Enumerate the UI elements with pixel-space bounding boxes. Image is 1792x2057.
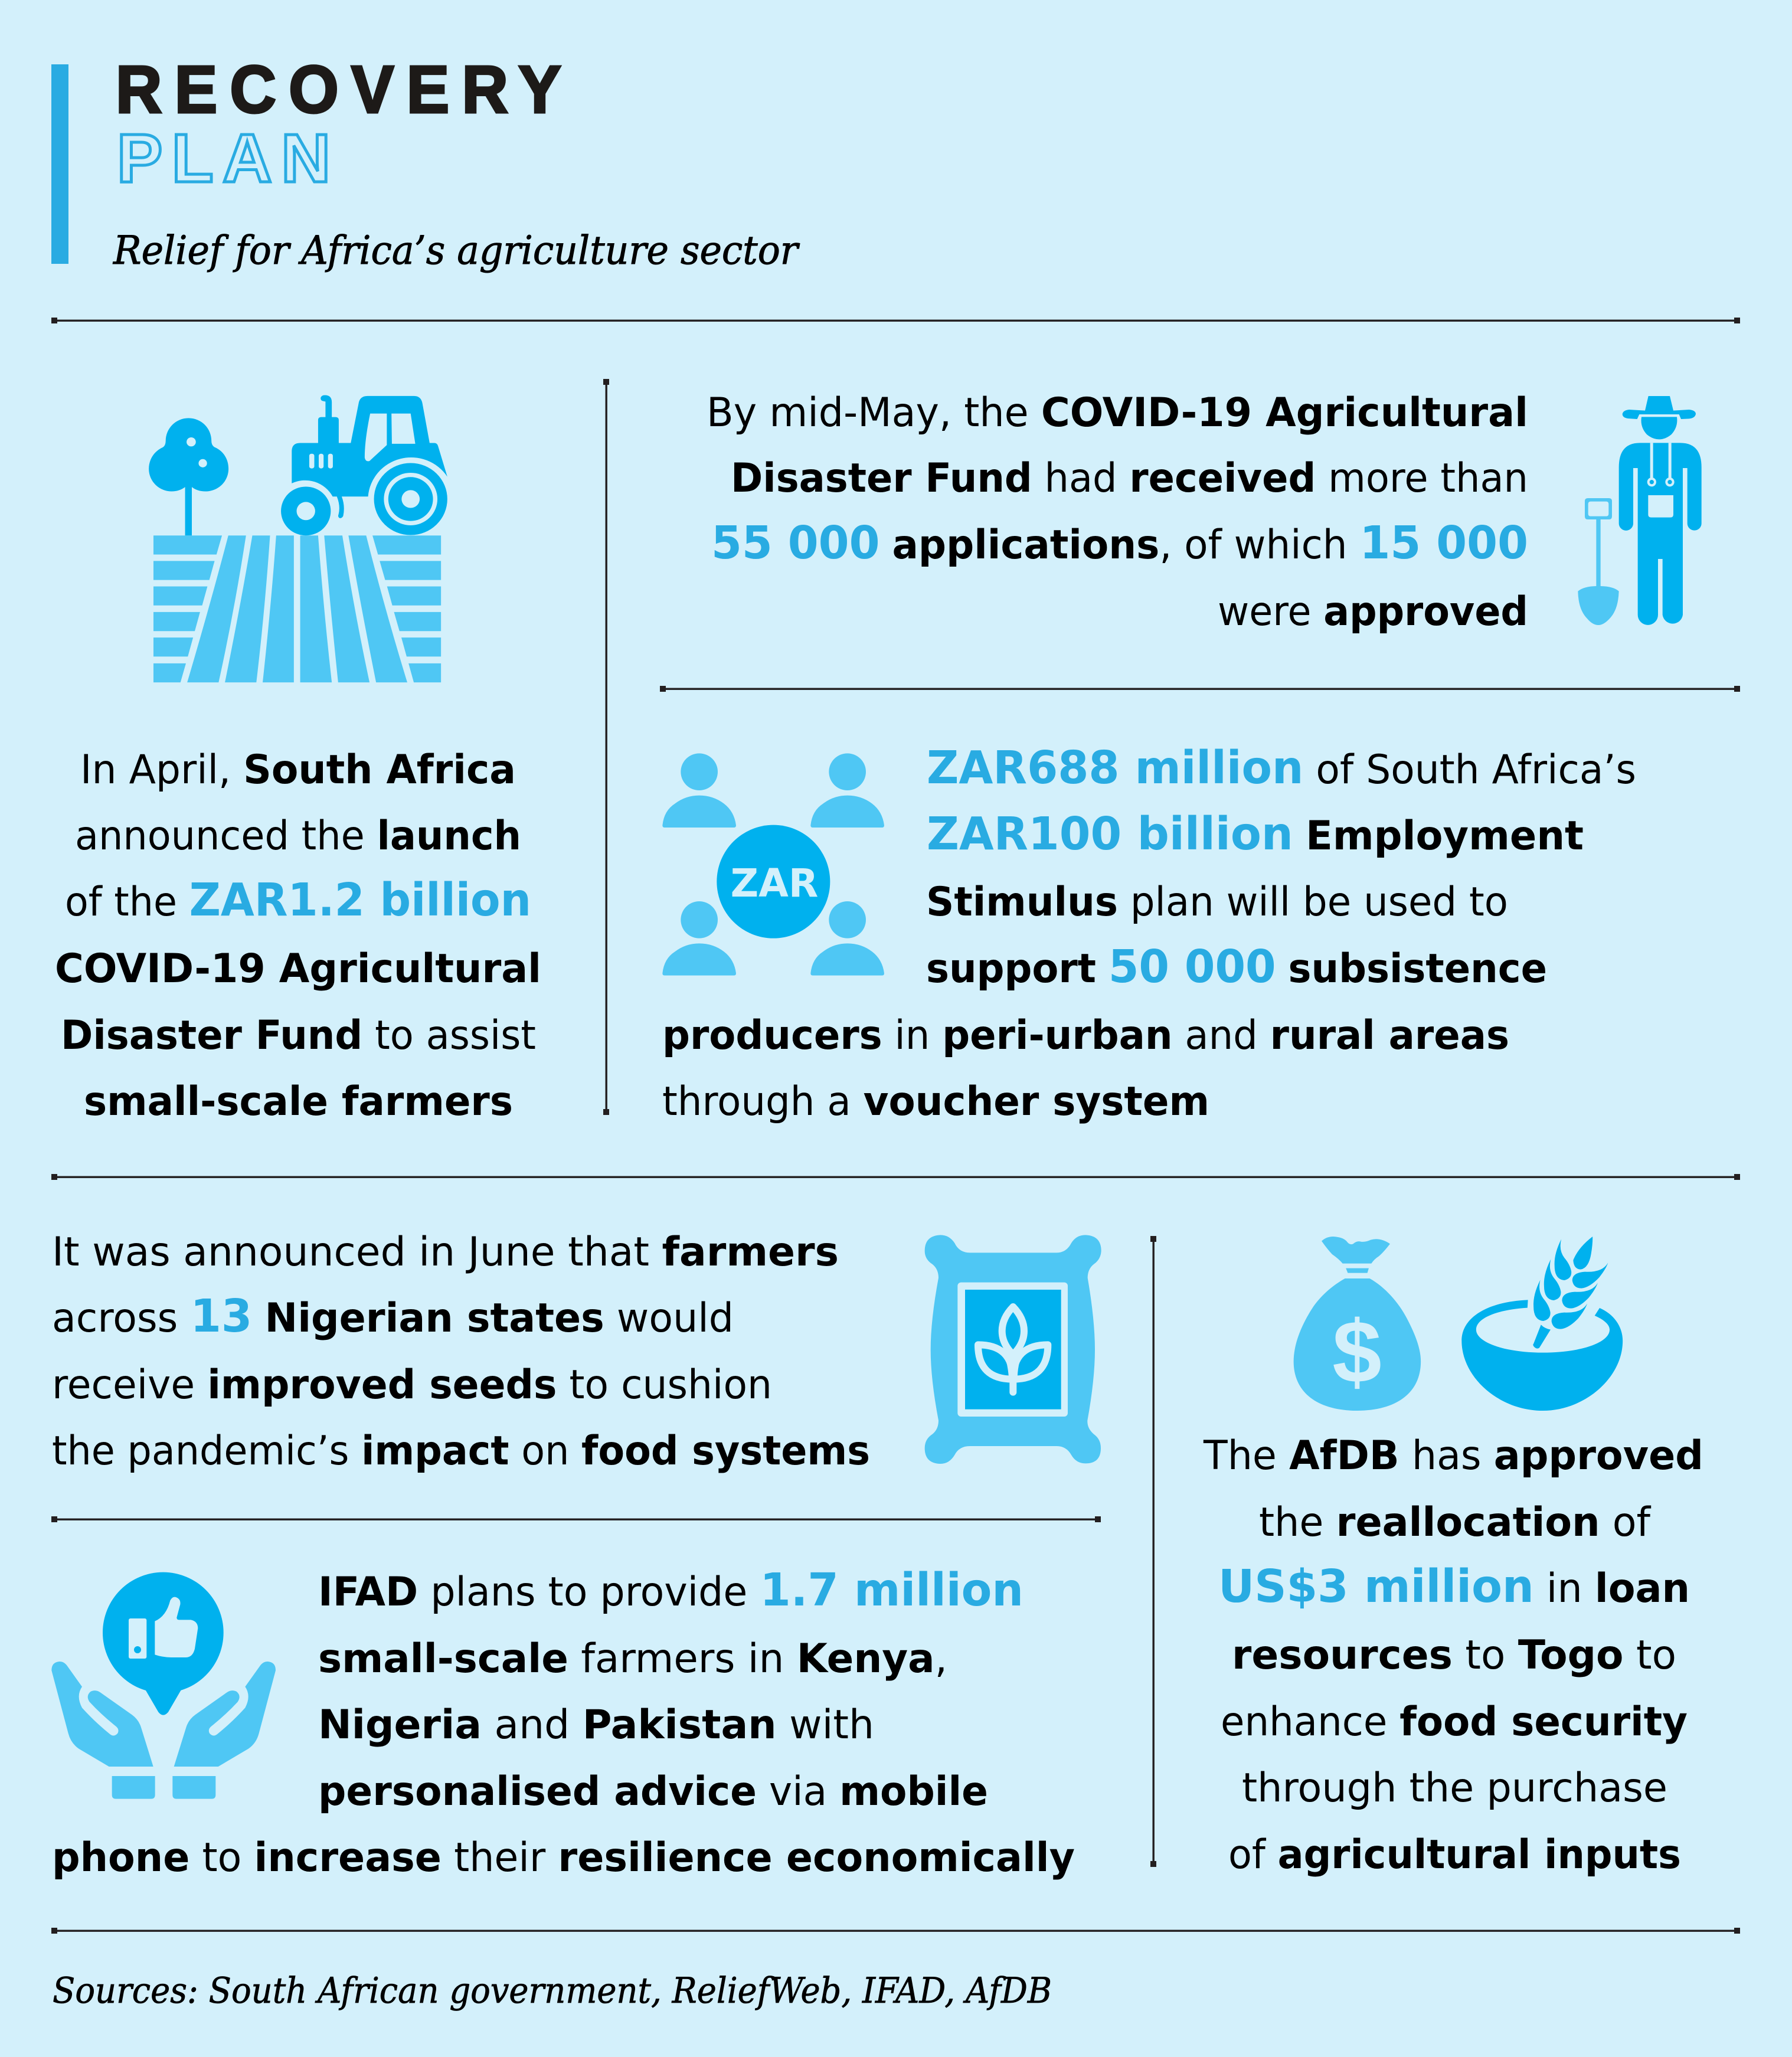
title: PLAN: [117, 120, 331, 197]
text: applications received: By mid-May, the COVID-19 Agricultural: [707, 390, 1528, 436]
text: employment stimulus: [662, 742, 1636, 1125]
ZAR coin: [717, 825, 830, 938]
text: AfDB reallocation: of agricultural inputs: [1228, 1832, 1681, 1878]
text: employment stimulus: producers in peri-urban and rural areas: [662, 1012, 1509, 1059]
text: employment stimulus: through a voucher system: [662, 1078, 1209, 1125]
text: IFAD personalised advice: personalised advice via mobile: [318, 1768, 988, 1815]
tree: [149, 418, 228, 535]
subtitle: Relief for Africa’s agriculture sector: [113, 228, 800, 273]
sack: [925, 1235, 1101, 1464]
text: AfDB reallocation: the reallocation of: [1259, 1499, 1652, 1546]
icon: hands with thumbs-up bubble: [51, 1572, 276, 1799]
label with plant: [957, 1283, 1068, 1417]
text: AfDB reallocation: through the purchase: [1242, 1765, 1667, 1811]
icon: farmer with shovel: [1578, 396, 1702, 625]
field: [153, 535, 441, 682]
people: [662, 753, 884, 976]
icon: seed sack: [925, 1235, 1101, 1464]
text: employment stimulus: ZAR688 million of South Africa’s: [927, 742, 1636, 794]
tractor: [281, 395, 447, 535]
text: Nigerian improved seeds: receive improved seeds to cushion: [52, 1362, 772, 1408]
text: applications received: [707, 390, 1528, 635]
shovel: [1578, 498, 1619, 625]
farmer: [1619, 396, 1702, 625]
text: South Africa fund launch: COVID-19 Agricultural: [55, 946, 541, 992]
text: South Africa fund launch: of the ZAR1.2 billion: [65, 874, 531, 927]
text: South Africa fund launch: [55, 747, 541, 1125]
text: applications received: 55 000 applications, of which 15 000: [711, 517, 1528, 570]
text: applications received: were approved: [1218, 588, 1528, 635]
text: IFAD personalised advice: small-scale farmers in Kenya,: [318, 1636, 947, 1682]
text: AfDB reallocation: The AfDB has approved: [1203, 1433, 1703, 1479]
text: South Africa fund launch: Disaster Fund to assist: [61, 1012, 536, 1059]
ZAR coin: ZAR: [731, 860, 818, 906]
icon: money bag: $: [1332, 1302, 1382, 1401]
bubble: [103, 1572, 224, 1715]
icon: bowl with wheat: [1461, 1237, 1623, 1411]
icon: farm field with tree and tractor: [149, 395, 447, 682]
text: South Africa fund launch: In April, South Africa: [80, 747, 516, 793]
title: RECOVERY: [116, 53, 561, 127]
text: Nigerian improved seeds: the pandemic’s impact on food systems: [52, 1428, 870, 1474]
text: Nigerian improved seeds: [52, 1229, 870, 1474]
text: Nigerian improved seeds: It was announced in June that farmers: [52, 1229, 839, 1276]
text: IFAD personalised advice: Nigeria and Pakistan with: [318, 1702, 874, 1748]
icon: ZAR with four people: [662, 753, 884, 976]
text: employment stimulus: Stimulus plan will be used to: [926, 879, 1508, 926]
text: AfDB reallocation: [1203, 1433, 1703, 1878]
text: applications received: Disaster Fund had received more than: [731, 455, 1528, 502]
title: [116, 53, 561, 197]
text: IFAD personalised advice: IFAD plans to provide 1.7 million: [318, 1564, 1023, 1617]
text: AfDB reallocation: enhance food security: [1221, 1699, 1688, 1745]
sources: Sources: South African government, ReliefWeb, IFAD, AfDB: [53, 1970, 1052, 2012]
text: IFAD personalised advice: phone to increase their resilience economically: [52, 1834, 1075, 1881]
text: IFAD personalised advice: [52, 1564, 1075, 1881]
text: AfDB reallocation: resources to Togo to: [1232, 1632, 1676, 1679]
text: South Africa fund launch: announced the launch: [75, 813, 521, 859]
accent bar: [51, 64, 68, 264]
icon: money bag: [1294, 1237, 1421, 1411]
text: Nigerian improved seeds: across 13 Nigerian states would: [52, 1290, 734, 1343]
text: employment stimulus: support 50 000 subsistence: [926, 941, 1547, 993]
text: AfDB reallocation: US$3 million in loan: [1218, 1561, 1690, 1613]
text: employment stimulus: ZAR100 billion Employment: [927, 808, 1584, 861]
hands: [51, 1662, 276, 1799]
text: South Africa fund launch: small-scale farmers: [84, 1078, 513, 1125]
